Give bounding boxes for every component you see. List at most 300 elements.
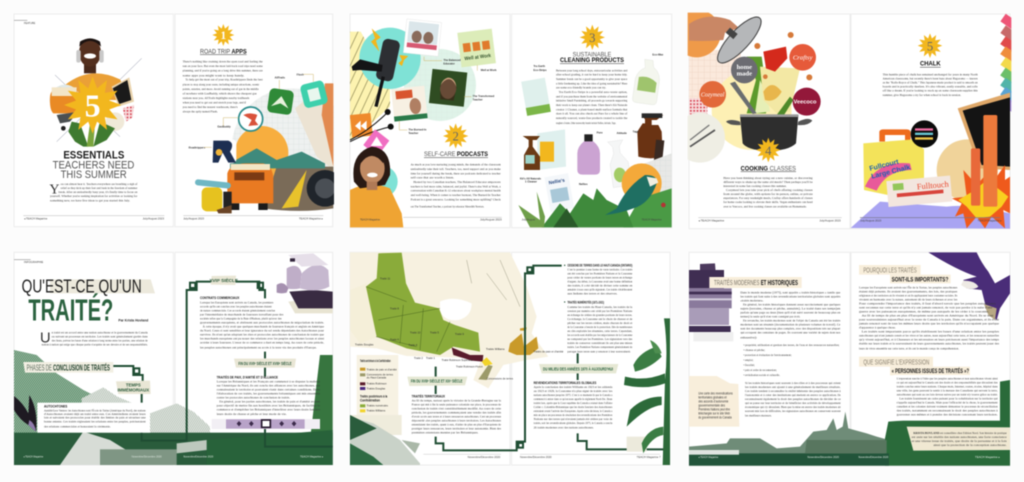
text: treaty paragraph: reconnaissent également la droit des peuples autochtones de décider de ce — [745, 397, 841, 401]
collage: teacher with star number five: 5 — [85, 87, 101, 123]
text: traités de paix, d'amitié et d'alliance: l'élaboration de ces traités, les gouvernements britanniques ont mis ensemble — [217, 391, 321, 396]
map legend: Traités de paix et d'amitié — [367, 367, 397, 371]
intro paragraph with drop cap: ou suivant un processus en territoire. Les traités sont généralement gardés dans — [52, 334, 148, 338]
logo badge: Veecoco: Veecoco — [794, 100, 817, 106]
logo badge: home made: home — [737, 64, 752, 71]
bullet list: • chasse et pêche; — [743, 348, 765, 352]
footer left: Novembre/Décembre 2020 — [132, 455, 162, 458]
product: Fulltouch chalk box — [886, 176, 952, 207]
text: revendications territoriales globales: traités, soit les revendications globales. Depuis 1975, le Canada a conclu — [534, 421, 613, 426]
text: contrats commerciaux: gouvernements européens, et obéissent aux protocoles autochtones de négociation de traités. — [200, 320, 324, 325]
text: contrats commerciaux: À cette époque, il n'y avait que quelques marchands de fourrures français et anglais en Amérique — [203, 323, 324, 329]
heading: chalk: CHALK — [920, 62, 941, 68]
text: modern versus historic treaties: modernes sont un résumés (documentation de plusieurs volumes de travail). Ce — [740, 322, 841, 326]
footer right: TEACH Magazine — [642, 219, 662, 222]
text: traités territoriaux: premières extensions menées par les Britanniques. — [412, 431, 478, 435]
text: modern versus historic treaties: Dans le monde moderne (1975), sont appelés « traités historiques » tandis que — [740, 290, 841, 295]
text: traités territoriaux: France qui mit à fin la seule puissance coloniale sur place, le processus de — [412, 403, 501, 408]
podcasts body text: As much as you love nurturing young minds, the demands of the classroom — [411, 163, 501, 168]
bullet list: • revitalisation sociale et culturelle. — [743, 373, 780, 377]
product: Nellie's detergent — [544, 173, 574, 212]
cleaning body text: initiative Small Furnishing, all proceeds go towards supporting — [556, 99, 628, 104]
label: fin du XVIIe siècle et XVIIIe siècle — [234, 359, 296, 368]
road trip body text: places to stop along your route, including unique attractions, scenic — [183, 82, 260, 87]
text: bullets on land cession treaties: partager leurs terres sans y renoncer à leur souveraineté. — [567, 350, 631, 354]
bullet list: • protection et évaluation de l'environnement; — [743, 353, 792, 357]
chalk body text — [883, 72, 978, 98]
text: revendications territoriales globales: au 1923 et 1929, la Couronne n'a plus signé de traités avec les — [534, 389, 613, 394]
icon: feather — [14, 395, 36, 432]
text: contrats commerciaux: les peuples autochtones ont principalement eu accès à la terre via des produits d'Europe. — [200, 346, 317, 350]
text: treaty people: s'appelle aujourd'hui le Canada. Mais pour l'efficacité de la chose, le gouvernement — [897, 400, 998, 405]
callout: Krista Hovland note: et une vitesse issue de traités, que droits de la personne et à la fois — [912, 439, 1007, 444]
product labels: Attitude — [617, 131, 627, 135]
road trip body text: planning, and if you're going on a long drive this summer, there are — [183, 69, 263, 74]
text: contrats commerciaux: de nature commerciale. Ces accords étaient généralement conclus — [200, 308, 276, 312]
heading: pourquoi les traités sont-ils importants: POURQUOI LES TRAITÉS — [863, 266, 917, 275]
illustration: stack of documents — [689, 263, 733, 341]
text: traités de paix, d'amitié et d'alliance: commerce et d'empêcher les Britanniques d'interférer avec leurs droits fonciers — [217, 407, 321, 411]
footer right: July/August 2023 — [183, 217, 205, 220]
text: bullets on land cession treaties: aux Indiens des terres et des réserves. — [567, 292, 617, 296]
label: fin du XVIIIe siècle et XIXe siècle: FIN DU XVIIIᵉ SIÈCLE ET XIXᵉ SIÈCLE — [411, 379, 463, 384]
product labels — [520, 52, 664, 186]
heading: sustainable cleaning products: SUSTAINABLE — [573, 52, 611, 58]
footer left: ◂ TEACH Magazine — [698, 219, 725, 222]
podcasts body text — [411, 163, 501, 209]
heading: traités modernes et historiques — [709, 277, 802, 288]
label: temps immémoriaux: TEMPS — [126, 383, 141, 388]
text: modern versus historic treaties: parfois qu'une page ou deux (bien qu'il n'ait suivi souvent de beaucoup plus en — [740, 310, 841, 314]
footer left: July/August 2023 — [143, 217, 165, 220]
footer right: Novembre/Décembre 2020 — [520, 456, 552, 459]
road trip body text: points, eateries, and more. Avoid running out of gas in the middle — [183, 87, 259, 92]
podcast card: Well at Work: Well at Work — [464, 53, 492, 62]
callout: statistics on treaties: téléchargée sur le site Web — [698, 412, 730, 416]
text: bullets on land cession treaties: ne comprend par les Premières. Les signataires vers des — [567, 337, 633, 341]
footer left: Novembre/Décembre 2020 — [807, 456, 840, 459]
product: Eco-Max bottle — [632, 58, 662, 105]
road trip body text: There's nothing like cruising down the open road and feeling the — [183, 60, 263, 64]
podcast labels: The Balanced — [443, 58, 461, 62]
bullet list: • paix et ordre de reconnexion; — [743, 368, 777, 372]
cooking body text: experiences. For easy weeknight meals, Craftsy offers hundreds of classes — [723, 196, 813, 201]
callout: statistics on treaties: Premières Nations peut être — [698, 408, 730, 412]
number five badge — [918, 33, 942, 58]
text: contrats commerciaux: sociétés telles que la Compagnie de la Baie d'Hudson, plutôt qu'avec des — [200, 316, 282, 321]
text: bullets on land cession treaties: Comme les traités du Haut-Canada, les traités de la — [567, 305, 633, 310]
spread: traités modernes and pourquoi les traités — [689, 252, 1010, 466]
map treaty labels: Traité 9 — [455, 332, 464, 336]
text: bullets on land cession treaties: les accords sont établis par les négociateurs de la Couronne — [567, 333, 633, 337]
icon: Flush app — [299, 80, 329, 109]
podcast labels — [399, 57, 497, 135]
text: why treaties matter: religieuses et des territoires où ils vivaient et où ils appliquaient leurs coutumes sociales. Ils — [859, 294, 958, 298]
text: traités territoriaux: entendaient des traités, quant à eux, d'aider de plus en plus d'Européens de — [412, 423, 501, 428]
label: du milieu des années 1970 à aujourd'hui — [539, 364, 618, 373]
app labels — [189, 73, 313, 149]
text: why treaties matter: étaient déjà présents. Ils avaient des gouvernements, des lois, des pratiques — [859, 290, 958, 295]
road trip body text: sun on your face. But even the most laid-back road trips need some — [183, 64, 263, 68]
number one badge — [212, 24, 234, 46]
text: revendications territoriales globales: Après la conclusion des traités Williams en 1923 et les addenda — [534, 385, 613, 389]
text: contrats commerciaux: survivre. Ils n'ont qu'un adoptant les rites et protocoles autochtones de conclusion de traités que — [200, 332, 324, 336]
heading: self-care podcasts: SELF-CARE PODCASTS — [424, 152, 488, 158]
heading: que signifie l'expression personnes issues de traités: « PERSONNES ISSUES DE TRAITÉS »? — [892, 366, 969, 375]
map legend: du Haut-Canada — [367, 376, 387, 380]
footer left: TEACH Magazine — [360, 219, 381, 222]
text: why treaties matter: Les traités sont importants parce qu'ils établissent les bases d'une relation entre les peuples — [862, 330, 1000, 334]
text: traités de paix, d'amitié et d'alliance: sur l'Amérique du Nord, ils ont conclu des alliances avec les autochtones, qui — [217, 383, 320, 388]
text: bullets on land cession treaties: ont été conclus par les Premières Nations et la Couronne — [567, 272, 633, 276]
section tag: INFOGRAPHIE — [24, 261, 44, 264]
podcasts body text: out The Transformed Teacher, a podcast by educator Meredith Newton. — [411, 204, 484, 209]
product: Kit Naturals spray and box — [523, 129, 566, 170]
text: why treaties matter: Lorsque les Européens sont arrivés sur l'Île de la Tortue, les peuples autochtones — [859, 285, 958, 291]
footer right — [520, 454, 661, 459]
map legend: Concessions de terres — [367, 373, 394, 377]
footer right: TEACH Magazine ▸ — [978, 219, 1002, 222]
podcast card: Balanced Educator — [403, 19, 442, 56]
road trip body text: you need to find the nearest washroom, there's — [183, 105, 238, 110]
bullet list: • emploi; — [743, 358, 753, 362]
text: contrats commerciaux: Lorsque les Européens sont arrivés au Canada, les premiers — [200, 300, 274, 305]
text: contrats commerciaux: par l'intermédiaire de marchands de fourrures travaillant pour des — [200, 312, 284, 316]
text: revendications territoriales globales: 26 traités modernes avec des nations autochtones. — [534, 426, 594, 430]
footer left: Novembre/Décembre 2020 — [468, 456, 501, 459]
callout: statistics on treaties: gouvernementale des — [698, 404, 725, 408]
illustration: bald eagle — [928, 252, 1010, 320]
cooking body text: different ways to shake up the same old meals? Then perhaps you'll be — [723, 180, 813, 184]
map treaty labels: Traité Robinson-Huron — [456, 364, 483, 368]
callout: statistics on treaties: du gouvernement du Canada — [698, 416, 732, 420]
spread: treaty map and territorial claims — [350, 252, 670, 465]
map treaty labels: Traités de paix et d'amitié — [533, 349, 564, 353]
callout: statistics on treaties — [689, 376, 739, 427]
footer right: TEACH Magazine ▸ — [975, 456, 1000, 459]
map treaty labels: Traité 10 — [410, 330, 421, 334]
intro paragraph with drop cap: U — [40, 331, 51, 347]
map treaty labels: Traité 8 — [390, 306, 399, 310]
heading: sustainable cleaning products: CLEANING PRODUCTS — [560, 58, 624, 64]
text: modern versus historic treaties: En revanche, les traités modernes sont de l'objet du Canada ont été les traités — [743, 318, 841, 323]
text box: autochtones — [37, 403, 150, 433]
text: revendications territoriales globales: mis en place un processus de résolution des revendications des Premières — [534, 413, 613, 417]
collage: cooking pot with ingredients — [673, 9, 812, 163]
footer left — [23, 215, 165, 220]
title with beige strip: TRAITÉ? — [28, 292, 113, 327]
map legend: Traités Williams — [367, 409, 386, 413]
text: why treaties matter: autochtones qui n'ont jamais cessés et les vivre et les autres, nous aujourd'hui cette terre, et les ressources naturelles — [859, 334, 1000, 339]
title with beige strip: Par Krista Hovland — [118, 317, 149, 322]
footer right: TEACH Magazine ▸ — [300, 455, 323, 458]
heading: traités modernes et historiques: TRAITÉS MODERNES ET HISTORIQUES — [714, 278, 798, 287]
road trip body text: always the aptly named Flush. — [183, 110, 218, 114]
text: contrats commerciaux: les marchands européens ont pu nouer des relations avec les peuples autochtones locaux et ainsi — [200, 336, 324, 340]
footer right: Novembre/Décembre 2020 — [858, 456, 889, 459]
chalk body text: American classrooms, but recently there's been buzz about Hagoromo — known — [883, 76, 978, 81]
map treaty labels: Traité Robinson-Supérieur — [442, 358, 473, 362]
footer right: July/August 2023 — [860, 219, 882, 222]
number four badge — [756, 138, 781, 162]
number five badge: 5 — [927, 39, 933, 53]
text: traités de paix, d'amitié et d'alliance: Lorsque les Britanniques et les Français ont commencé à se disputer la maîtrise — [217, 379, 321, 383]
intro paragraph with drop cap — [40, 330, 148, 347]
heading: que signifie l'expression personnes issues de traités: QUE SIGNIFIE L'EXPRESSION — [863, 358, 929, 367]
text: revendications territoriales globales — [534, 381, 613, 430]
intro text: yourself. Whether you're seeking inspiration for activities or looking for — [50, 194, 138, 198]
podcast labels: Teacher — [408, 131, 418, 135]
chalk body text: boards and is practically dustless. It's also vibrant, easily erasable, and rolls — [883, 84, 978, 89]
map legend: Traités numérotés — [367, 404, 389, 408]
map legend: Traités postérieurs à la — [360, 395, 387, 399]
product labels: 1 Cleaner — [525, 180, 537, 184]
footer right — [183, 215, 323, 220]
text: bullets on land cession treaties: annuités à tous ceux qu'ils signaient. Ces traités s'établissaient — [567, 288, 632, 292]
text: bullets on land cession treaties: de la Couronne a besoin de la protection. Dès de nombreuses — [567, 325, 633, 329]
timeline connector — [113, 282, 333, 447]
text: why treaties matter: d'apparence à quelque chose. — [859, 326, 896, 330]
footer left — [23, 455, 162, 458]
text: treaty people: L'expression suscite à l'idée que les peuples autochtones et non autochtones vivent ainsi — [897, 376, 998, 380]
callout: Krista Hovland note — [907, 427, 1010, 451]
heading: phases de conclusion de traités — [23, 362, 113, 373]
footer right — [522, 219, 662, 222]
podcasts body text: teachers to feel more calm, balanced, and joyful. There's also Well at Work, a — [411, 184, 501, 189]
spread: self-care podcasts and sustainable cleaning products — [350, 14, 672, 228]
product: Crayola large chalk box: Fullcourt — [869, 159, 900, 173]
title: TEACHERS NEED — [53, 159, 135, 171]
callout: Krista Hovland note: KRISTA HOVLAND est conseillère chez Edition Nord. Son histoire de pratique — [913, 431, 1007, 435]
map treaty labels: Traité 5 — [430, 330, 439, 334]
text: bullets on land cession treaties: TRAITÉS NUMÉROTÉS (1871-1921) — [567, 299, 604, 304]
product labels: Pure — [597, 131, 603, 135]
logo badge: Craftsy: Craftsy — [793, 54, 813, 61]
product labels: Nellies — [579, 182, 588, 186]
label: fin du XVIIe siècle et XVIIIe siècle: FIN DU XVIIᵉ SIÈCLE ET XVIIIᵉ SIÈCLE — [238, 361, 292, 366]
text: revendications territoriales globales: existaient avant l'arrivée des Européens. Après cette décision, le Canada a — [534, 409, 613, 414]
text: bullets on land cession treaties: traités. Les Premières Nations comprennent généralement de — [567, 345, 633, 349]
cleaning body text: Summer break can be a good opportunity to give your space — [556, 77, 628, 81]
timeline connector — [436, 266, 670, 450]
text: traités de paix, d'amitié et d'alliance: connaissaient le territoire et pouvaient s'unir dans certaines conditions. Dans — [217, 387, 321, 391]
text: revendications territoriales globales: commencé à entrer dans ce qu'on nous appelle le règlement Nord-Est. Deux — [534, 397, 613, 401]
bullet list: • fiscalité; — [743, 363, 755, 367]
footer left: ◂ TEACH Magazine — [698, 456, 719, 459]
callout: Krista Hovland note: est axée sur les rétablis des nations autochtones, une forte conscience — [912, 435, 1007, 440]
footer left: July/August 2023 — [480, 219, 502, 222]
cleaning body text: and if you purchase them from the website of environmental — [556, 94, 627, 98]
chalk body text: summer, give Hagoromo a try for when school is back in session. — [883, 93, 961, 98]
text box: autochtones: Aaniiih/Gros Ventres: les Autochtones sont l'École de Tarine (Amérique du Nord), des nations — [44, 407, 146, 413]
text box: autochtones: bonne entente. Ces traités régissaient les relations entre les peuples, préciseraient — [44, 419, 146, 424]
footer right: TEACH Magazine ▸ — [299, 217, 323, 220]
cleaning body text: Between your long school days, extracurricular activities and — [556, 68, 628, 73]
road trip body text: some apps you might want to keep handy. — [183, 73, 245, 77]
collage: bird and foliage — [518, 153, 672, 227]
illustration: corn stalk — [624, 318, 670, 465]
road trip body text — [183, 60, 263, 114]
text: modern versus historic treaties: En général, les traités historiques donnent assez succinctement que quelques — [743, 302, 841, 307]
cleaning body text: creator 1 Cleaner, a plant-based multi-surface formula that — [556, 107, 627, 112]
text: revendications territoriales globales: REVENDICATIONS TERRITORIALES GLOBALES — [534, 381, 597, 385]
text: modern versus historic treaties: exhaustive): — [740, 335, 757, 339]
podcasts body text: self-care that are worth a listen. — [411, 176, 454, 180]
text: bullets on land cession treaties: d'argent. Au début, la Couronne avait une bonne définition — [567, 280, 633, 285]
map treaty labels — [355, 276, 564, 380]
heading: cooking classes: COOKING CLASSES — [741, 166, 796, 172]
text: bullets on land cession treaties: pêcher sur les terres cédées, mais chacun de droit et — [567, 321, 632, 326]
heading: pourquoi les traités sont-ils importants: SONT-ILS IMPORTANTS? — [892, 276, 948, 283]
cleaning body text: are some eco-friendly brands you can try. — [556, 86, 606, 90]
cleaning body text: naturally sourced, waste-free products created to tackle the — [556, 116, 628, 121]
text: treaty paragraph: Si les traités historiques sont souvent à des rôles et à des processus qui créent — [745, 381, 841, 385]
cooking body text: from around the globe, with options for in-person, online, or private — [723, 192, 813, 197]
text: treaty paragraph: les meilleurs moteurs. — [745, 414, 772, 418]
podcasts body text: conversation with Canadian K-12 educators about workplace mental health — [411, 189, 501, 193]
podcasts body text: and well-being. When it comes to teacher burnout, The Burned-In Teacher — [411, 193, 501, 198]
text: traités territoriaux: protéger leurs ressources, leurs territoires et leur autonomie. Bien des — [412, 427, 502, 432]
label: du milieu des années 1970 à aujourd'hui: DU MILIEU DES ANNÉES 1970 À AUJOURD'HUI — [543, 364, 613, 371]
number three badge — [580, 25, 605, 50]
product labels: Eco-Max — [652, 52, 664, 56]
text: treaty people: des traités, notamment en reconnaissant le droit des peuples autochtones à — [897, 408, 998, 413]
text: contrats commerciaux: accéder à leurs fourrures. L'essor de ce commerce a duré en temps long. Au cours de cette période, — [200, 340, 324, 345]
intro text: ou can almost hear it. Teachers everywhere are breathing a sigh of — [61, 182, 138, 186]
section tag — [14, 20, 36, 25]
intro paragraph with drop cap: des lieux, prévus les bases d'une relation à long terme entre les parties, une relation de — [52, 338, 148, 343]
footer right — [860, 217, 1002, 222]
label: temps immémoriaux: IMMÉMORIAUX — [117, 388, 149, 393]
footer right — [858, 456, 1000, 459]
intro text: Y — [49, 182, 59, 197]
text: traités de paix, d'amitié et d'alliance: pour objectif de mettre fin aux hostilités avec les Britanniques, de faciliter le — [217, 403, 321, 408]
label: XVIIe siècle — [209, 276, 238, 285]
cooking body text: over to Veecoco, and live cooking classes are available on Homemade. — [723, 204, 807, 209]
illustration: Parliament Hill skyline — [689, 380, 1010, 466]
product labels: Eco-Strips — [533, 68, 547, 72]
number two badge — [443, 123, 468, 149]
logo badge: Cozymeal — [699, 81, 726, 108]
heading: phases de conclusion de traités: PHASES DE CONCLUSION DE TRAITÉS — [27, 363, 110, 373]
collage: colourful chalk edge — [1000, 14, 1019, 114]
podcasts body text: Hosted by two Canadian teachers, The Balanced Educator empowers — [413, 180, 501, 185]
title with beige strip — [22, 276, 155, 327]
map treaty labels: Traité 1 — [426, 356, 435, 360]
podcast card: Burned-In Teacher — [391, 86, 428, 122]
heading: road trip apps: ROAD TRIP APPS — [200, 49, 247, 55]
cooking body text: for home cooks looking to elevate their skills. Vegan enthusiasts can head — [723, 200, 813, 204]
chalk body text: as the "Rolls-Royce of Chalk." This Japanese-made product is said to smooth on — [883, 80, 978, 84]
intro text: relief as they kick up their feet and bask in the freedom of summer — [61, 186, 138, 190]
icon: GasBuddy app — [239, 107, 263, 131]
logo badge: Cozymeal: Cozymeal — [701, 92, 725, 98]
logo badge: home made — [731, 57, 758, 83]
cleaning body text — [556, 68, 628, 126]
text: treaty paragraph: qui se passe sur leur territoire et de bénéficier des activités de développement — [745, 401, 841, 405]
text box: autochtones: lois et suivaient des protocoles pour établir des limites de paix et sécuriser une — [44, 416, 146, 420]
text: why treaties matter: vivaient en harmonie avec la nature, autrement dit de leurs richesses et avec les — [859, 298, 958, 303]
road trip body text: when you need to get out and stretch your legs, and if — [183, 101, 247, 106]
section tag: FEATURE — [24, 22, 36, 25]
text: why treaties matter: leurs de vivre ensemble sur cette terre, et ils ont le monde conçu de compréhension. — [859, 346, 959, 351]
map legend — [357, 355, 398, 417]
text: revendications territoriales globales: Calder c. Colombie-Britannique que les droits fonciers des Autochtones — [534, 405, 613, 409]
footer right: Novembre/Décembre 2020 — [183, 455, 214, 458]
text: traités territoriaux: d'avoir accès aux terres et à leurs ressources autochtones. Cest un processus — [412, 415, 502, 419]
logo badge: home made: made — [737, 70, 752, 77]
cleaning body text: after-school grading, it can be hard to keep your home tidy. — [556, 73, 627, 78]
app labels: Flush — [297, 73, 304, 77]
text: why treaties matter: Pour comprendre l'importance des traités, il faut d'abord savoir que les peuples autochtones — [859, 302, 996, 307]
text: treaty people: Les traités fournissent un cadre puisant pour la cohabitation sur la territoire qui — [899, 396, 998, 400]
text: bullets on land cession treaties: CESSIONS DE TERRES DANS LE HAUT-CANADA (ONTARIO) — [567, 264, 632, 268]
podcast labels: The Transformed — [473, 94, 495, 98]
chalk body text: This humble piece of chalk has remained unchanged for years in many North — [883, 72, 978, 76]
number two badge: 2 — [453, 130, 459, 144]
map legend: Traités Robinson — [367, 382, 387, 386]
text box: autochtones: des relations commerciales et honoraient la cérémonie. — [44, 425, 111, 429]
map legend: Traités antérieurs à la Confédération — [360, 359, 391, 363]
map legend: Confédération — [360, 398, 380, 402]
text: contrats commerciaux: accords qu'ils ont conclus avec les peuples autochtones étaient — [200, 304, 272, 308]
footer right: July/August — [522, 219, 535, 222]
product: Pure soap bottle — [577, 134, 600, 175]
app labels: AllTrails — [275, 75, 286, 79]
label: XVIIe siècle: XVIIᵉ SIÈCLE — [209, 276, 238, 283]
podcast labels: Educator — [443, 61, 455, 65]
podcast labels: The Burned-In — [408, 128, 427, 132]
cooking body text: interested in some fun cooking classes this summer. — [723, 184, 787, 188]
product: chalk colour swatch circle — [911, 120, 938, 148]
text: modern versus historic treaties — [740, 290, 841, 339]
heading: pourquoi les traités sont-ils importants — [859, 265, 951, 283]
text: bullets on land cession treaties — [564, 264, 633, 354]
text: why treaties matter: Au fil de temps de plus en plus d'Européens sont arrivés en Amérique du Nord. Ils se sont — [862, 314, 993, 318]
intro text — [49, 182, 138, 203]
map of Canadian treaties — [350, 252, 548, 388]
text: bullets on land cession treaties: traités de conserver considérant ils ont plus une mieux — [567, 341, 633, 345]
text: treaty people — [893, 375, 1000, 421]
text: why treaties matter: pour souverainistes aujourd'hui avec le reste de Canada à la paix. Dans ces organismes, et ils n'ont — [859, 318, 999, 323]
title: ESSENTIALS — [63, 150, 125, 162]
footer left: July/August 2023 — [819, 219, 841, 222]
callout: Krista Hovland note: ainsi que la protection de la conception autochtone. — [933, 443, 1007, 447]
text: treaty paragraph: les traités modernes ont ajouté à une généralement de meilleurs résultats. — [745, 385, 841, 389]
podcasts body text: undoubtedly take their toll. Teachers, too, need support and as you make — [411, 167, 501, 172]
text: revendications territoriales globales: traités lors, après que la Cour suprême du Canada a statué dans l'affaire — [534, 401, 613, 406]
text: bullets on land cession treaties: cession par numéro ont cédé par les Premières Nations — [567, 309, 633, 313]
illustration: wampum belt — [212, 419, 320, 429]
text: traités de paix, d'amitié et d'alliance — [217, 374, 321, 416]
footer left: ◂ TEACH Magazine — [23, 455, 44, 458]
text: contrats commerciaux: du Nord. Ceux-ci sont sensibles et leur ignorance du sol rendu dépendants des Autochtones pour — [200, 328, 325, 332]
intro paragraph with drop cap: n traité est un accord entre une nation autochtone et le gouvernement du Canada — [52, 330, 148, 334]
cooking body text: Have you been thinking about trying out a new cuisine, or discovering — [723, 176, 813, 181]
cleaning body text: does it all. You can also check out Pure for a whole line of — [556, 112, 628, 116]
text: modern versus historic treaties: termes) la seule qu'il n'en vont consigné par écrit. — [740, 314, 800, 318]
product: Tage amber spray bottle — [637, 113, 664, 162]
map legend: Traités Douglas — [367, 386, 386, 390]
collage: earbuds and play icons — [350, 109, 394, 157]
section tag — [14, 259, 44, 264]
text: why treaties matter: établis sur leurs traités et la souveraineté de leurs gouvernements autochtones, les traités peuvent jouer des — [859, 342, 1000, 347]
text: treaty people: autochtones qui sont au ces lois devrez suivre par un traité n'y trouve grâce au traité. — [897, 392, 998, 396]
app labels: GasBuddy — [217, 125, 231, 129]
text: traités de paix, d'amitié et d'alliance: En général, pour les parties autochtones, les traités de paix et d'amitié avaient — [219, 399, 320, 404]
text: why treaties matter: sont reconnus sur cette terre et qu'ils n'y ont jamais renoncé, de voir pas perdre à la suite d'une — [859, 306, 993, 311]
intro text: something new, we have five ideas to get you started this July. — [50, 198, 130, 203]
